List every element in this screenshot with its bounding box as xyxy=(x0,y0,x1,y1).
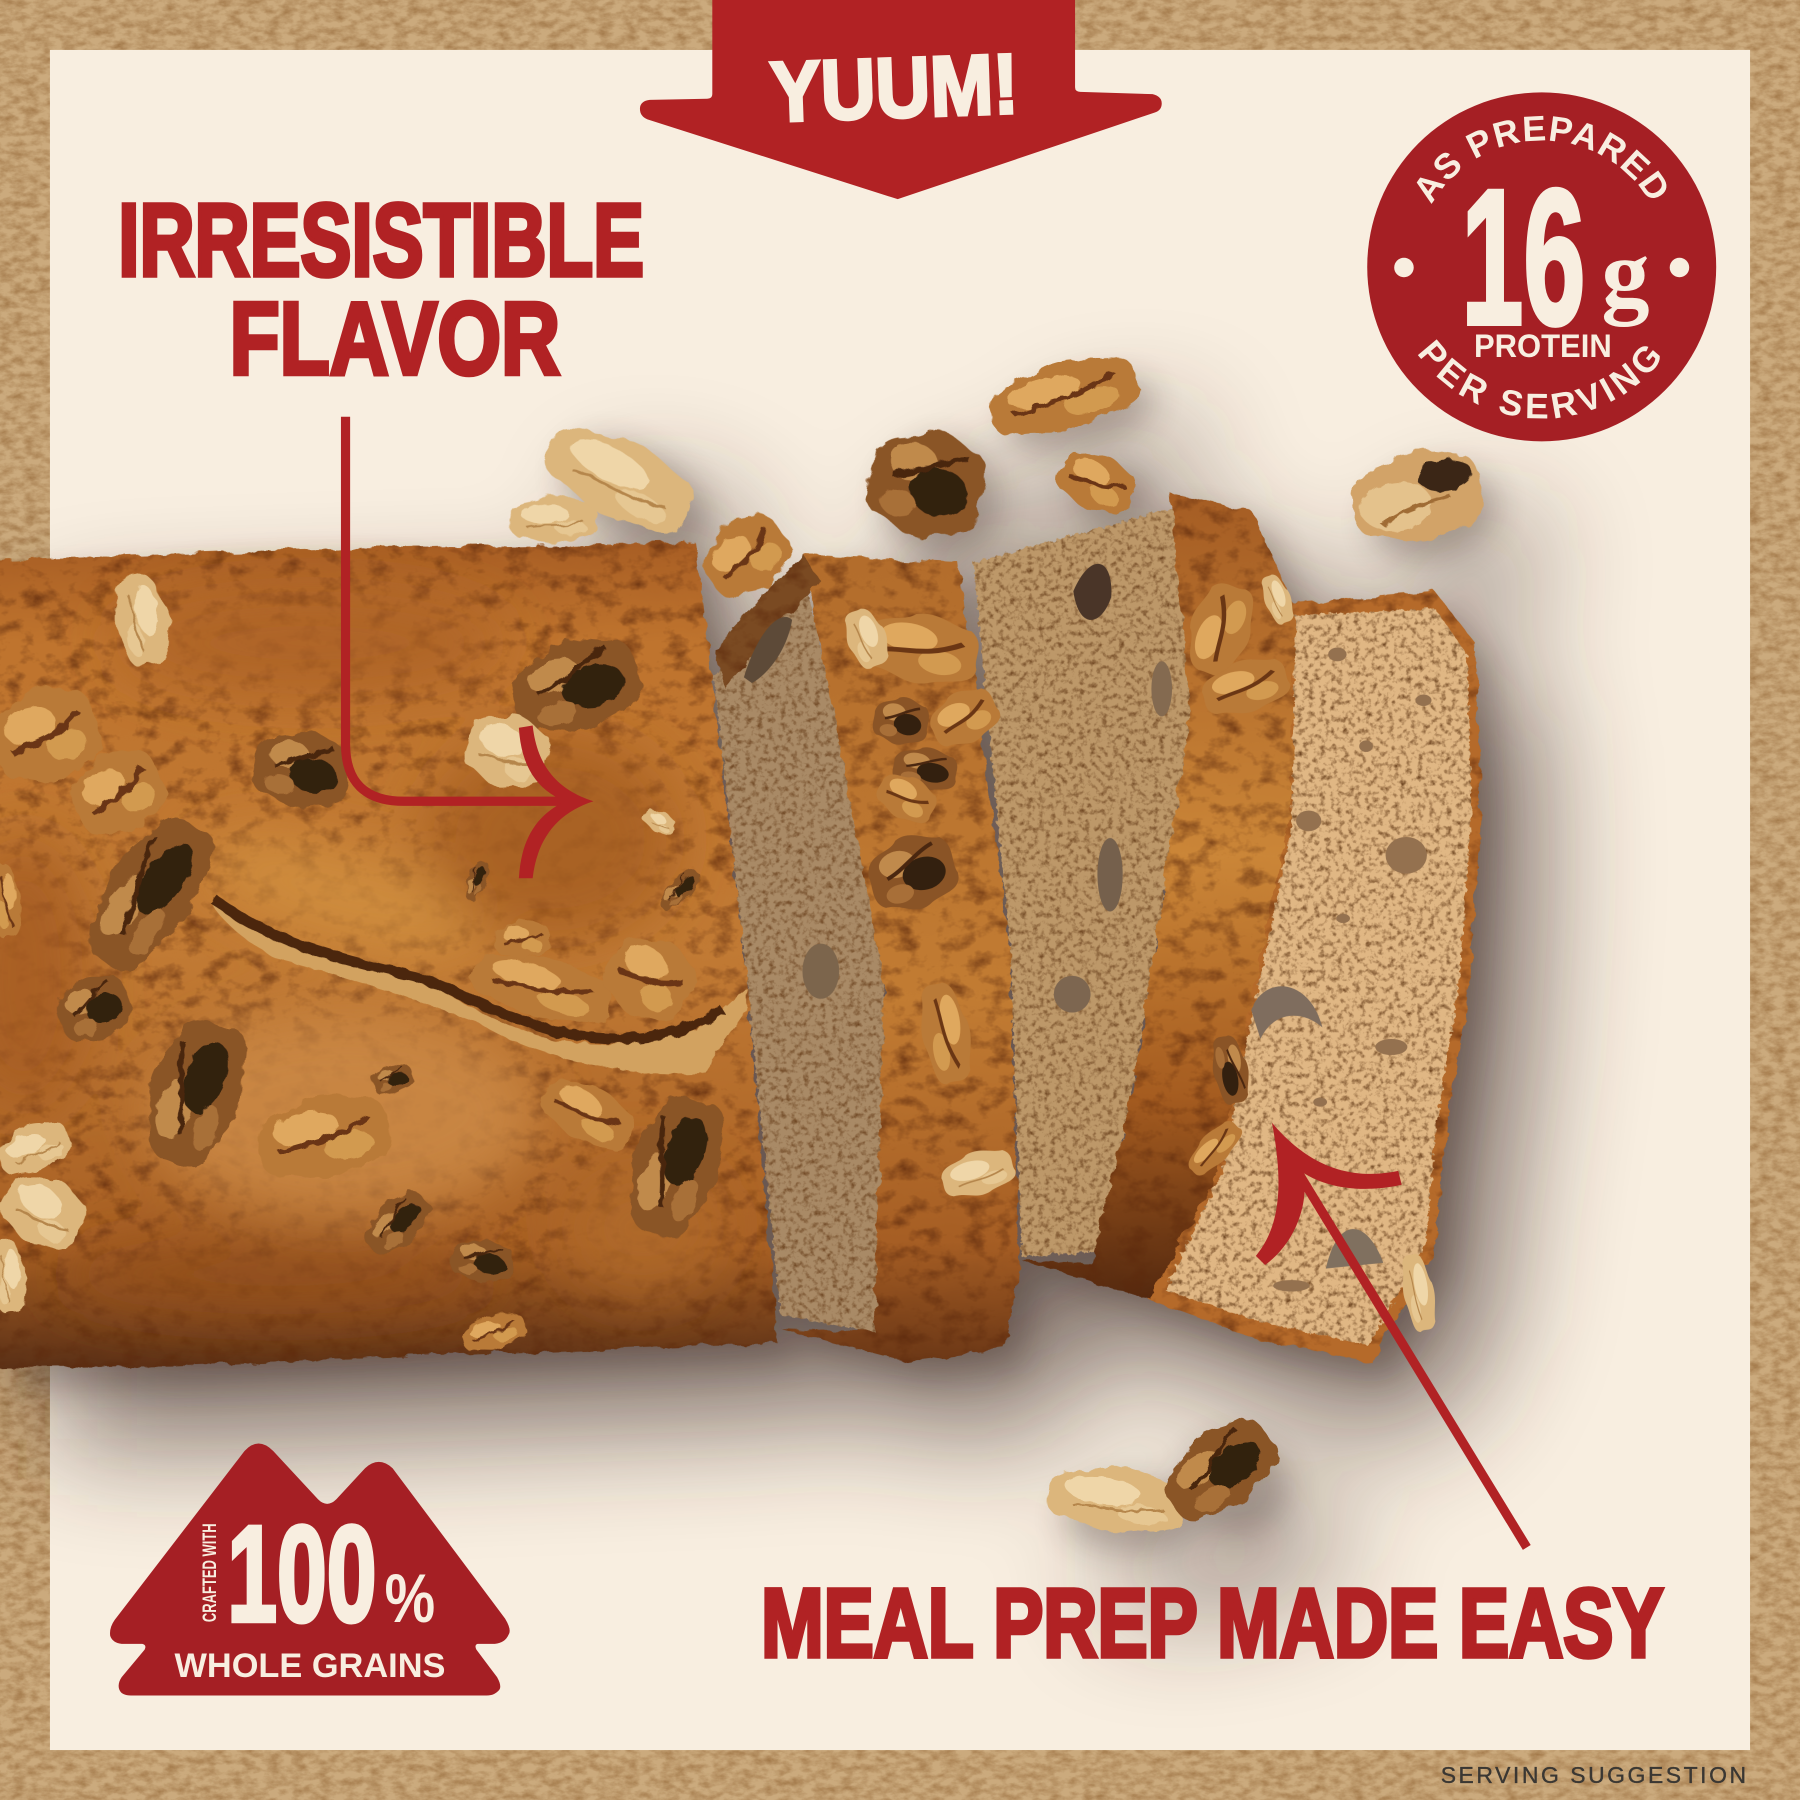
arrow: flavor arrow pointing to loaf xyxy=(346,417,593,878)
curved text bottom: PER SERVING xyxy=(1418,339,1660,418)
bread: far slice xyxy=(1148,591,1481,1363)
badge label: PROTEIN xyxy=(1474,328,1612,364)
bread: main loaf xyxy=(0,542,777,1368)
loaf crust xyxy=(0,542,777,1368)
heading: irresistible flavor: FLAVOR xyxy=(230,280,560,396)
walnuts below the loaf xyxy=(1043,1403,1292,1541)
bread: first slice xyxy=(714,554,1019,1361)
slice 1 top-left crust edge xyxy=(714,554,820,689)
soft drop shadows under the bread xyxy=(16,365,1548,1605)
banner arrow: YUUM! xyxy=(640,0,1162,199)
bread: middle slice xyxy=(973,494,1299,1299)
slice 2 walnuts and pockets xyxy=(1054,564,1299,1182)
banner shape xyxy=(640,0,1162,199)
badge: 100% whole grains xyxy=(110,1444,510,1696)
walnut at slice corner xyxy=(1397,1251,1441,1334)
slice 2 crumb xyxy=(973,505,1194,1257)
badge circle xyxy=(1367,92,1716,441)
badge number: 16 xyxy=(1461,149,1585,365)
slice 3 air pockets and walnut xyxy=(1251,647,1432,1291)
footnote: serving suggestion: SERVING SUGGESTION xyxy=(1441,1762,1746,1788)
curved text top: AS PREPARED xyxy=(1416,116,1666,204)
badge: 16g protein xyxy=(1367,92,1716,442)
whole grains label: WHOLE GRAINS xyxy=(174,1647,445,1685)
crafted with vertical label: CRAFTED WITH xyxy=(199,1523,221,1622)
walnuts on loaf xyxy=(0,570,741,1357)
100 numerals: 100 xyxy=(227,1497,377,1650)
walnuts behind the loaf xyxy=(510,344,1489,611)
arrow: meal prep arrow pointing to slice xyxy=(1256,1123,1527,1547)
slice 3 crumb xyxy=(1165,608,1472,1345)
slice 1 crumb xyxy=(714,574,898,1337)
badge dots xyxy=(1394,258,1689,277)
mountain shape xyxy=(110,1444,510,1696)
loaf colour mottling xyxy=(0,591,723,1314)
slice 1 crust xyxy=(781,554,1019,1361)
heading: irresistible flavor: IRRESISTIBLE xyxy=(118,182,644,298)
slice 3 crust xyxy=(1148,591,1481,1363)
badge unit: g xyxy=(1601,219,1650,326)
heading: irresistible flavor xyxy=(118,182,644,396)
slice 1 walnuts xyxy=(744,603,1019,1204)
percent sign: % xyxy=(385,1560,435,1637)
slice 2 crust xyxy=(1022,494,1295,1299)
loaf crack xyxy=(210,901,746,1074)
banner text: YUUM! xyxy=(769,36,1020,139)
